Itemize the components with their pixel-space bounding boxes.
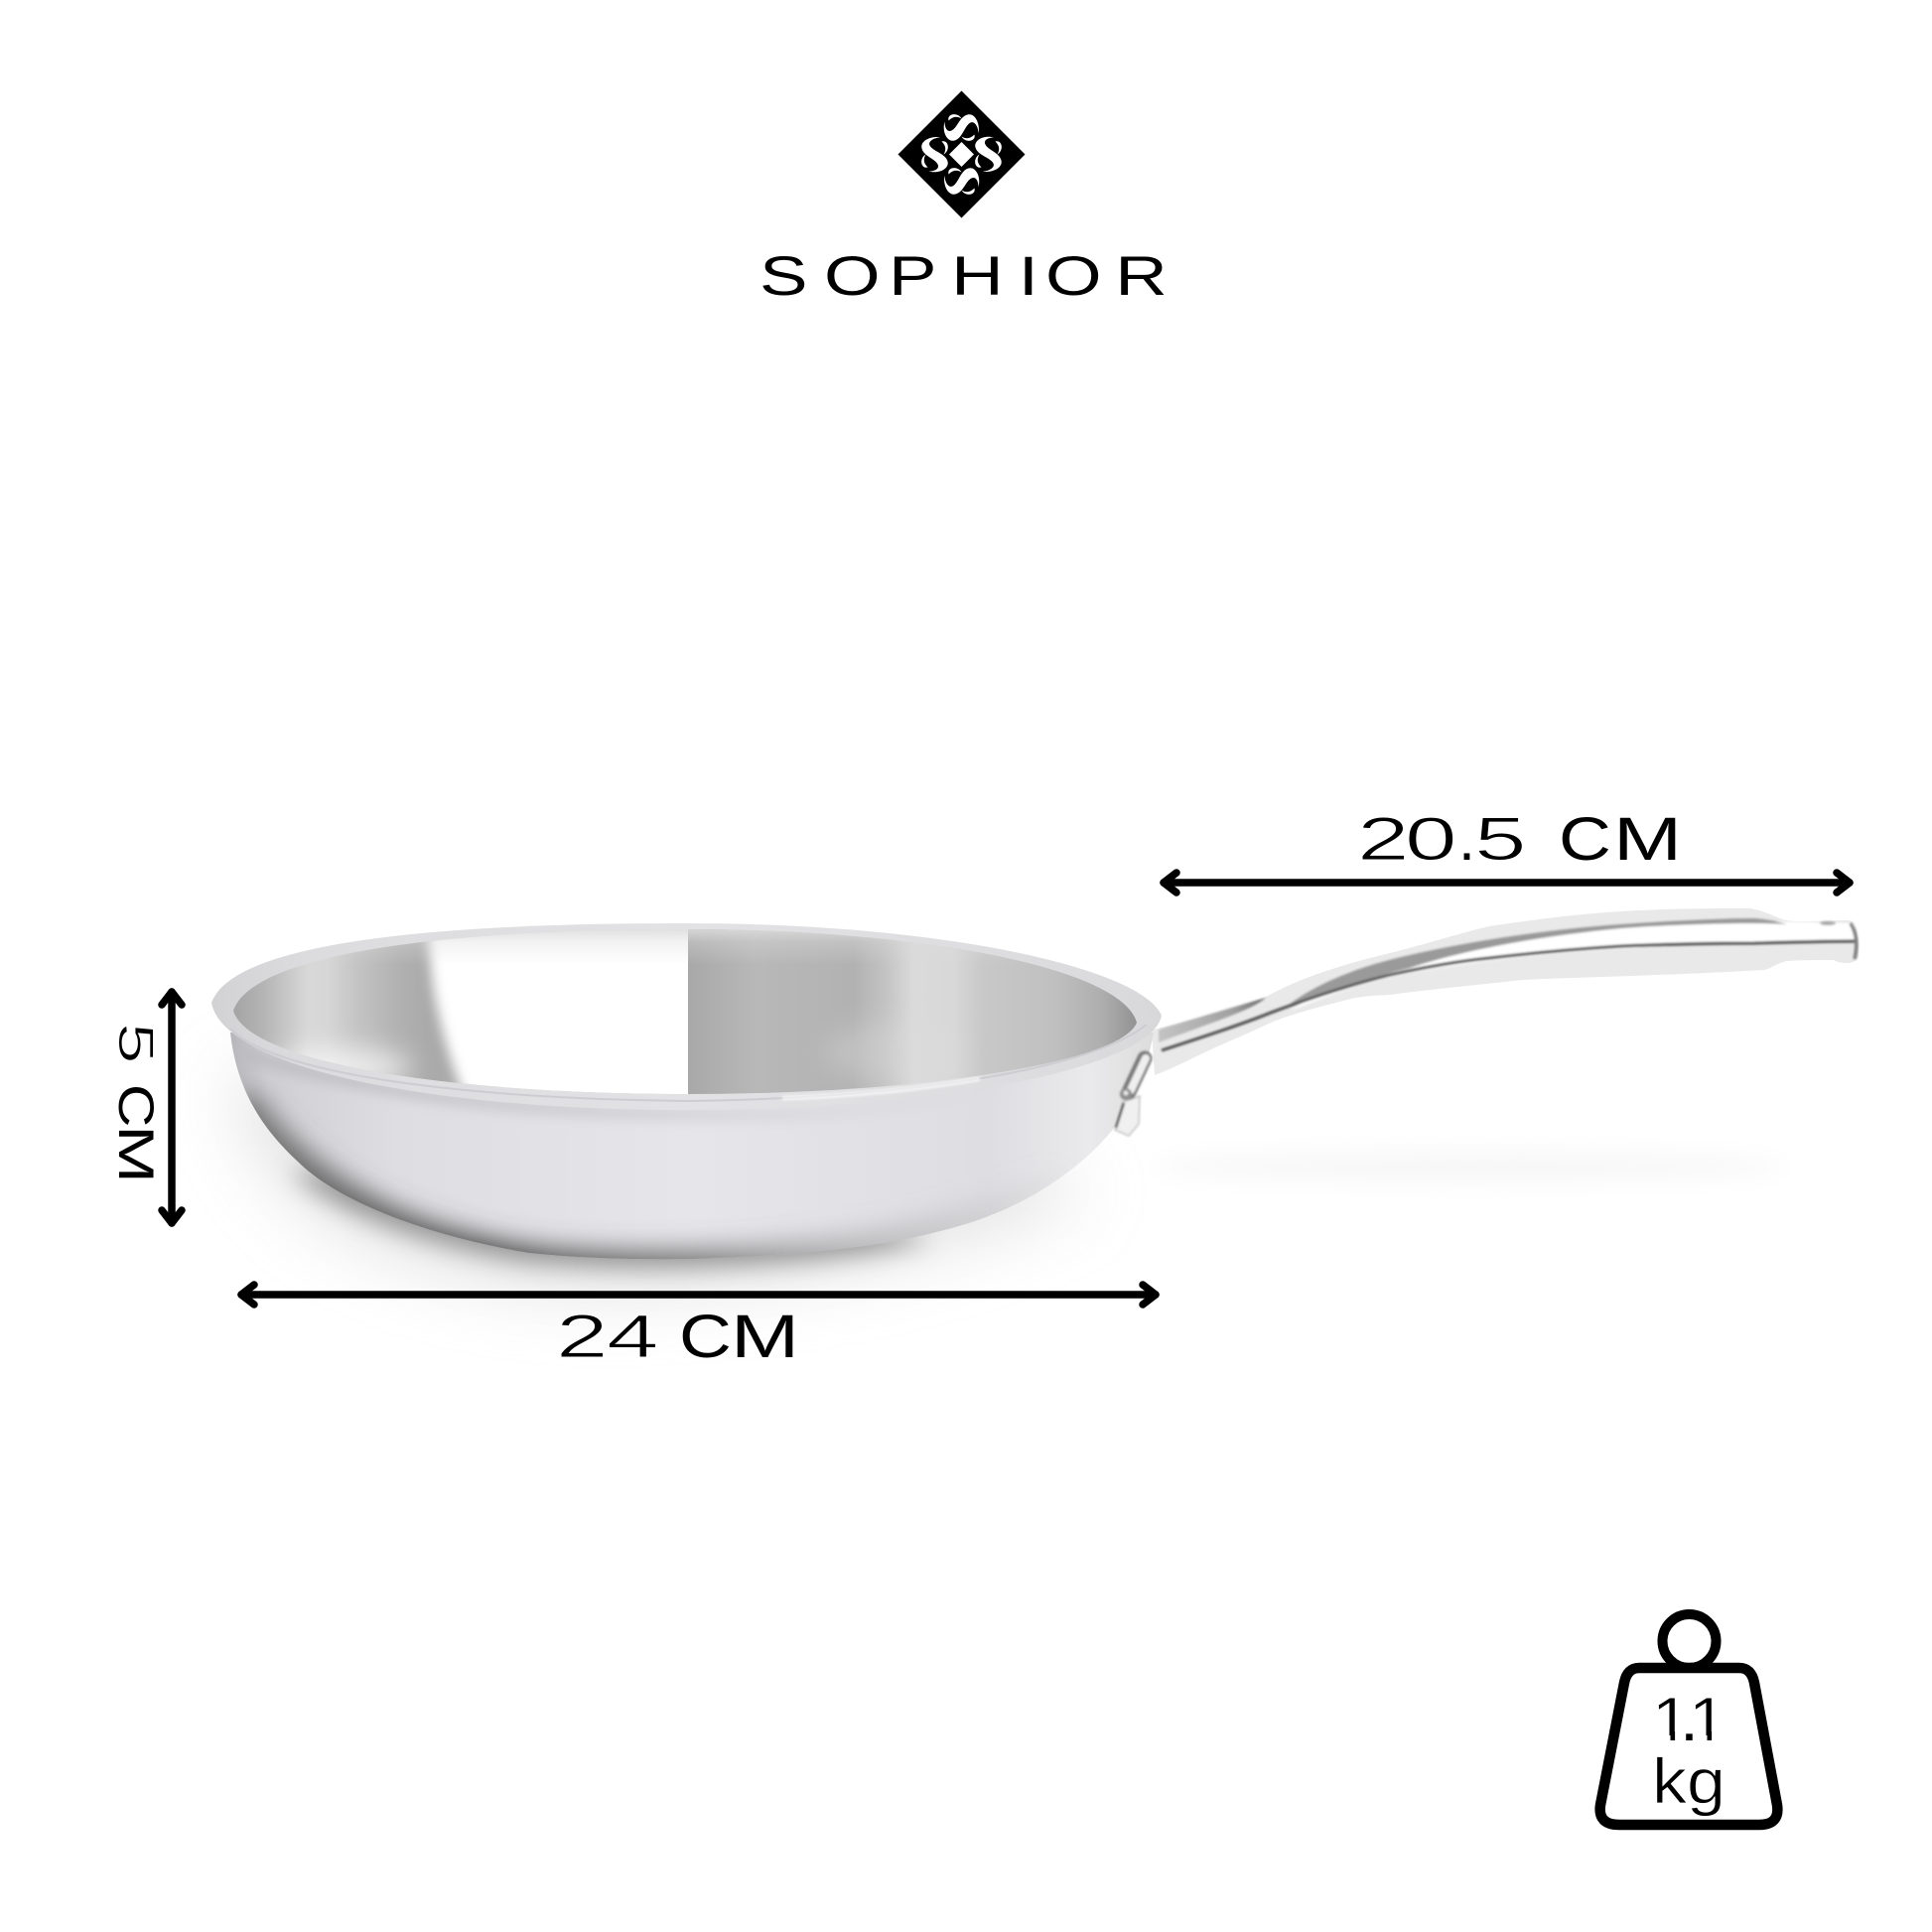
rivet and plate (1115, 1058, 1146, 1136)
label: handle length 20.5 CM: C (1559, 806, 1611, 874)
pan body (230, 1033, 1154, 1273)
interior lighter patches (286, 1031, 888, 1078)
icon: diamond emblem (897, 91, 1025, 218)
label: height 5 CM (108, 1023, 164, 1183)
label: diameter 24 CM: M (731, 1304, 799, 1370)
label: handle length 20.5 CM: 5 (1474, 805, 1527, 873)
weight value: . (1680, 1685, 1699, 1753)
handle reflections (1159, 918, 1857, 1050)
pan handle (1152, 908, 1859, 1075)
label: handle length 20.5 CM: 2 (1357, 805, 1410, 873)
arrow: pan diameter (241, 1285, 1156, 1305)
logo: Sophior brand mark and wordmark (759, 91, 1168, 307)
wordmark: SOPHIOR (759, 244, 1168, 307)
photo: stainless steel frying pan (211, 908, 1859, 1294)
label: height 5 CM: C (108, 1084, 164, 1127)
label: diameter 24 CM: C (679, 1304, 732, 1371)
weight unit: kg (1652, 1745, 1725, 1817)
weight value: 1 (1652, 1685, 1690, 1753)
label: diameter 24 CM: 4 (607, 1303, 659, 1370)
label: diameter 24 CM (556, 1303, 799, 1371)
label: height 5 CM: M (108, 1125, 164, 1183)
label: handle length 20.5 CM: M (1613, 806, 1682, 873)
arrow: handle length (1164, 873, 1850, 893)
pan interior (233, 929, 1137, 1094)
label: handle length 20.5 CM: 0 (1405, 805, 1457, 873)
arrow: pan height (162, 992, 182, 1223)
label: height 5 CM: 5 (108, 1023, 164, 1064)
interior highlight (422, 929, 688, 1094)
pan shadow (230, 1072, 1787, 1294)
label: handle length 20.5 CM (1357, 805, 1682, 874)
pan rim (211, 923, 1162, 1110)
label: handle length 20.5 CM: . (1458, 805, 1475, 873)
weight value (1658, 1698, 1712, 1740)
icon: weight with 1.1 kg (1600, 1614, 1777, 1825)
label: diameter 24 CM: 2 (556, 1303, 609, 1370)
weight value: 1 (1689, 1685, 1726, 1753)
